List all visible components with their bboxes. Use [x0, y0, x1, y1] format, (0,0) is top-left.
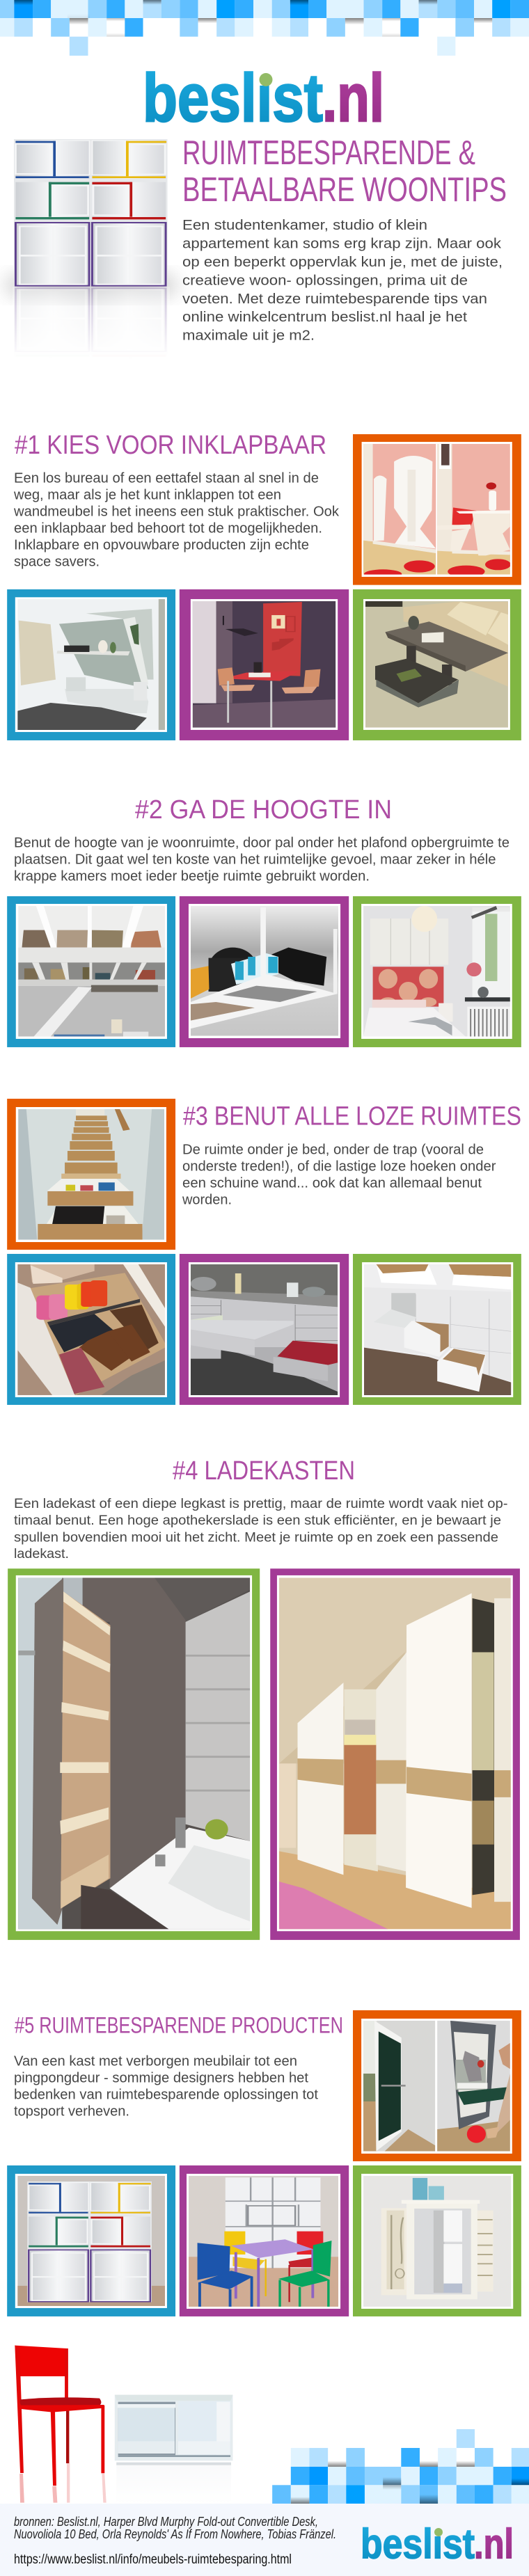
text: section 2 — [14, 835, 510, 884]
title — [182, 134, 507, 209]
intro text: online winkelcentrum beslist.nl haal je het — [182, 310, 467, 325]
photo: lift-top coffee table with storage — [365, 601, 508, 728]
panels: section 2 photos — [7, 896, 521, 1047]
photo: murphy bed with sofa — [17, 599, 165, 730]
text: section 1 — [13, 470, 340, 569]
text: section 1: space savers. — [14, 554, 100, 569]
text: section 5: Van een kast met verborgen meubilair tot een — [14, 2053, 297, 2069]
panels: section 1 photos — [7, 434, 521, 740]
text: section 5: bedenken van ruimtebesparende oplossingen tot — [14, 2087, 318, 2102]
intro text — [182, 218, 503, 344]
photo: shoe drawer under stairs — [17, 1264, 165, 1395]
source url: https://www.beslist.nl/info/meubels-ruimtebesparing.html — [14, 2552, 292, 2567]
footer band — [0, 2504, 529, 2576]
photo: small bedroom with cupboards over the bed — [363, 906, 510, 1037]
text: section 4: Een ladekast of een diepe legkast is prettig, maar de ruimte wordt vaak niet op- — [14, 1497, 508, 1511]
logo: beslist.nl: .nl — [322, 60, 384, 136]
intro text: voeten. Met deze ruimtebesparende tips van — [182, 292, 487, 307]
photo: pull-out bathroom cabinet — [18, 1577, 251, 1929]
text: section 2: plaatsen. Dit gaat wel ten koste van het ruimtelijke gevoel, maar zeker in héle — [14, 852, 496, 867]
text: section 3: De ruimte onder je bed, onder de trap (vooral de — [182, 1142, 484, 1157]
intro text: Een studentenkamer, studio of klein — [182, 218, 427, 233]
top pixel banner — [0, 0, 529, 56]
panels: section 3 stairs photo — [7, 1099, 175, 1250]
photo: mirror with hidden jewellery cabinet — [363, 2176, 511, 2307]
text: section 1: Een los bureau of een eettafel staan al snel in de — [14, 470, 319, 486]
text: section 4: timaal benut. Een hoge apothekerslade is een stuk efficiënter, en je bewaart je — [14, 1513, 501, 1528]
panels: section 3 photos — [7, 1254, 521, 1405]
logo: beslist.nl: beslist — [143, 60, 323, 136]
bottom pixel banner — [272, 2429, 529, 2504]
text: section 5: pingpongdeur - sommige designers hebben het — [14, 2070, 308, 2085]
text: section 3: een schuine wand... ook dat kan allemaal benut — [182, 1175, 482, 1191]
text: section 4 — [14, 1497, 508, 1561]
heading: #1 kies voor inklapbaar: #1 KIES VOOR INKLAPBAAR — [15, 431, 326, 460]
heading: #4 ladekasten: #4 LADEKASTEN — [173, 1456, 355, 1486]
text: section 5: topsport verheven. — [14, 2104, 129, 2119]
footer logo: beslist.nl: .nl — [474, 2520, 514, 2568]
photo: ping-pong door — [363, 2021, 510, 2152]
text: section 2: Benut de hoogte van je woonruimte, door pal onder het plafond opbergruimte te — [14, 835, 510, 850]
footer logo: beslist.nl: beslist — [361, 2520, 475, 2568]
photo: shelf unit opened into table with four chairs — [189, 2176, 338, 2307]
photo: attic wall with pull-out drawers — [364, 1264, 511, 1395]
photo: fold-away table and bench on pink wall — [363, 444, 510, 575]
intro text: maximale uit je m2. — [182, 328, 315, 344]
text: section 1: wandmeubel is het ineens een stuk praktischer. Ook — [13, 504, 340, 519]
heading: #2 ga de hoogte in: #2 GA DE HOOGTE IN — [135, 795, 392, 825]
text: section 2: krappe kamers moet ieder beetje ruimte gebruikt worden. — [14, 868, 370, 884]
text: section 1: Inklapbare en opvouwbare producten zijn echte — [14, 537, 309, 552]
text: section 3: onderste treden!), of die lastige loze hoeken onder — [182, 1159, 496, 1174]
text: section 3 — [182, 1142, 496, 1207]
photo: pull-out kitchen table and seat — [191, 1264, 338, 1395]
intro text: creatieve woon- oplossingen, prima uit de — [182, 273, 468, 288]
photo: tall pull-out attic wardrobes — [278, 1578, 511, 1929]
intro text: op een beperkt oppervlak kun je, met de juiste, — [182, 255, 503, 270]
text: section 3: worden. — [182, 1192, 232, 1207]
intro text: appartement kan soms erg krap zijn. Maar ook — [182, 237, 502, 252]
sources text: bronnen: Beslist.nl, Harper Blvd Murphy Fold-out Convertible Desk, — [14, 2515, 318, 2529]
text: section 1: een inklapbaar bed behoort tot de mogelijkheden. — [14, 520, 322, 536]
photo: wall-mounted red fold-down desk — [192, 601, 335, 728]
bottom furniture: red chair and shelf box — [15, 2346, 232, 2504]
text: section 5 — [14, 2053, 318, 2119]
sources text — [14, 2515, 336, 2541]
text: section 4: ladekast. — [14, 1547, 69, 1561]
text: section 1: weg, maar als je het kunt inklappen tot een — [13, 487, 281, 502]
photo: staircase with pull-out drawers — [18, 1109, 164, 1240]
panels: section 5 photos — [7, 2010, 521, 2316]
text: section 4: spullen bovendien mooi uit het zicht. Meet je ruimte op en zoek een passende — [14, 1531, 498, 1545]
photo: cube shelf unit closed — [17, 2176, 165, 2306]
heading: #5 ruimtebesparende producten: #5 RUIMTEBESPARENDE PRODUCTEN — [15, 2013, 343, 2038]
photo: bookshelves under sloped ceiling — [18, 906, 165, 1037]
photo: ceiling storage rack in garage — [191, 906, 338, 1035]
panels: section 4 photos — [8, 1568, 520, 1940]
sources text: Nuovoliola 10 Bed, Orla Reynolds' As If From Nowhere, Tobias Fränzel. — [14, 2527, 336, 2541]
hero: modular shelf with reflection — [4, 139, 178, 437]
